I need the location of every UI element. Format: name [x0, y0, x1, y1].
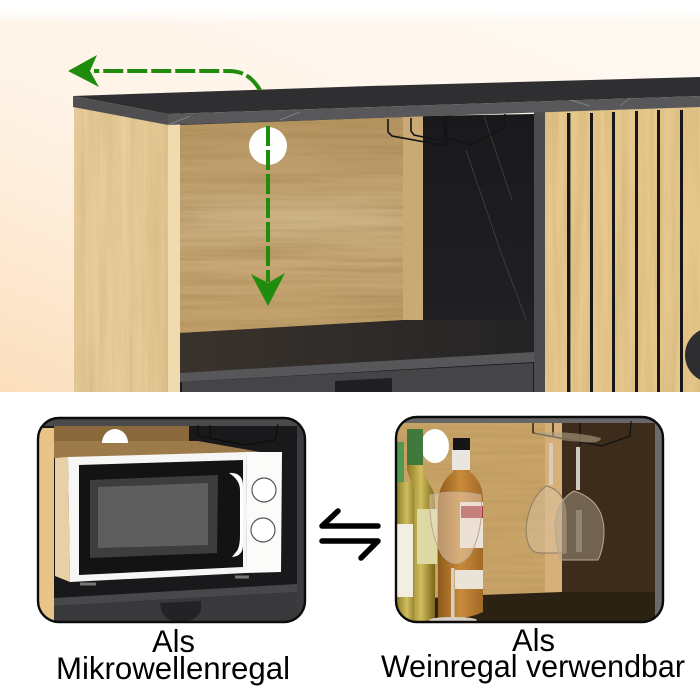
black interior side	[423, 114, 534, 322]
microwave	[68, 452, 282, 584]
drawer handle	[335, 378, 392, 392]
mesh	[98, 483, 208, 548]
bottle green cap	[407, 429, 437, 622]
hanging glass 2	[555, 447, 604, 560]
microwave side	[55, 457, 70, 582]
top slab band	[44, 419, 297, 426]
panel: wine rack use	[396, 417, 664, 623]
power dial	[251, 518, 275, 542]
rack	[198, 424, 278, 445]
mounting hole	[249, 127, 287, 165]
green dashed arrow: left	[68, 55, 260, 90]
caption: microwave shelf: Mikrowellenregal	[56, 650, 290, 686]
wine glass front	[429, 492, 482, 623]
grey strip right	[655, 423, 662, 616]
caption: wine rack	[381, 622, 685, 684]
handle	[229, 473, 243, 557]
light strip	[545, 423, 563, 593]
window	[90, 475, 218, 558]
shelf front edge	[180, 352, 534, 382]
hanging glass 1	[526, 443, 566, 553]
drawer front	[182, 363, 533, 392]
front edge of left panel	[168, 125, 180, 392]
interior vein	[466, 116, 530, 330]
left side panel	[74, 107, 168, 392]
floor	[435, 592, 655, 621]
amber bottle	[438, 438, 483, 618]
centre divider	[534, 112, 545, 392]
back wood	[54, 426, 189, 441]
dark interior	[562, 421, 656, 601]
shelf surface	[180, 320, 534, 373]
bottle far left	[397, 442, 414, 620]
control panel	[246, 452, 282, 573]
swap arrows icon	[322, 511, 378, 558]
green dashed arrow: down	[251, 126, 285, 306]
caption: wine rack: Weinregal verwendbar	[381, 648, 685, 684]
top slab	[73, 77, 700, 125]
rack	[533, 421, 631, 446]
left wood strip	[38, 428, 54, 622]
white half hole	[102, 429, 128, 443]
white hole	[421, 429, 449, 463]
cabinet photo	[73, 77, 700, 392]
caption: microwave shelf: Als	[152, 623, 195, 659]
drawer	[54, 592, 297, 622]
caption: microwave shelf	[56, 623, 290, 686]
right grey strip	[297, 424, 304, 616]
wine glass rack	[388, 114, 505, 146]
slatted door	[545, 106, 700, 392]
top band	[404, 418, 655, 423]
door glass	[79, 460, 243, 575]
shelf front	[54, 584, 297, 606]
wood back panel	[180, 116, 423, 333]
timer dial	[252, 478, 276, 502]
feet	[80, 577, 249, 584]
caption: wine rack: Als	[512, 622, 555, 658]
panel: microwave use	[38, 418, 306, 622]
door knob	[685, 327, 700, 383]
drawer handle	[160, 601, 201, 622]
